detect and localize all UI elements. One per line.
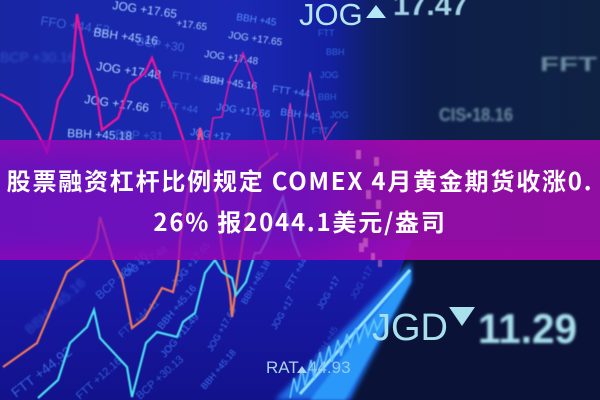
ticker text lower panel: JOG +17.66 bbox=[205, 306, 238, 353]
label: JGD ticker lower right: 11.29 bbox=[478, 305, 577, 352]
ticker text lower panel: FTT +44 bbox=[283, 256, 309, 291]
ticker text left panel: JOG +17 bbox=[190, 127, 231, 144]
ticker text lower panel: BBH +45 bbox=[313, 325, 340, 361]
ticker text lower panel: BBH +45.16 bbox=[21, 274, 89, 337]
ticker text fading right column: FTT bbox=[318, 28, 335, 38]
ticker text lower panel: FTT +44.11 bbox=[117, 298, 162, 340]
label: RAT ticker: 44.93 bbox=[308, 358, 351, 377]
ticker text left panel: BCP +31 bbox=[115, 127, 164, 144]
ticker text lower panel: BBH +45.18 bbox=[199, 347, 238, 391]
lower left deep blue panel bbox=[0, 240, 415, 400]
blurred ticker labels: FFT bbox=[540, 54, 597, 76]
line chart: pink overlay upper segment bbox=[180, 128, 222, 250]
ticker text lower panel: JOG +17.48 bbox=[118, 244, 170, 283]
title: 股票融资杠杆比例规定 COMEX 4月黄金期货收涨0. bbox=[7, 162, 593, 197]
ticker text left panel: BBH +45 bbox=[280, 107, 321, 124]
label: JGD ticker lower right bbox=[372, 305, 577, 352]
ticker text left panel: BBH +45.16 bbox=[93, 25, 159, 48]
ticker text left panel bbox=[0, 0, 321, 144]
title bbox=[7, 162, 593, 238]
ticker text lower panel: JOG +17 bbox=[315, 275, 342, 311]
title: 26% 报2044.1美元/盎司 bbox=[153, 203, 447, 238]
ticker text left panel: FTT +44 bbox=[272, 84, 311, 100]
blurred ticker labels bbox=[439, 54, 597, 125]
ticker text lower panel: BCP +30.16 bbox=[93, 248, 150, 302]
ticker text left panel: FFO +44.52 bbox=[40, 13, 111, 38]
ticker text fading right column: BBH bbox=[326, 47, 345, 57]
purple title band bbox=[0, 140, 600, 260]
ticker text lower panel: JOG +17.65 bbox=[170, 240, 213, 289]
blurred ticker labels: CIS▪18.16 bbox=[439, 105, 513, 125]
ticker text left panel: BCP +30.16 bbox=[0, 49, 76, 65]
label: RAT ticker bbox=[266, 358, 351, 377]
ticker text lower panel: BBH +45.18 bbox=[239, 259, 272, 306]
ticker text lower panel bbox=[8, 240, 375, 400]
ticker text left panel: FTT +44.49 bbox=[172, 70, 225, 88]
ticker text fading right column: JOG bbox=[320, 70, 339, 80]
label: JOG ticker top right bbox=[299, 0, 468, 32]
ticker text left panel: JOG +17.48 bbox=[204, 49, 259, 68]
line chart: upper pink line bbox=[0, 14, 190, 165]
ticker text fading right column: JOG bbox=[330, 110, 349, 120]
ticker text lower panel: BBH +45.16 bbox=[156, 283, 199, 332]
line chart: orange and pink lower line bbox=[3, 128, 278, 367]
ticker text lower panel: JOG +11.49 bbox=[159, 312, 202, 360]
ticker text fading right column bbox=[312, 28, 349, 136]
ticker text left panel: +17.65 bbox=[176, 18, 208, 33]
ticker text fading right column: FTT bbox=[312, 126, 329, 136]
ticker text left panel: FTT +44 bbox=[160, 100, 199, 116]
line chart: thin pink peak bbox=[285, 72, 337, 170]
ticker text left panel: BBH +45.18 bbox=[67, 126, 133, 143]
ticker text lower panel: JOG +17 bbox=[269, 295, 296, 331]
label: RAT ticker: RAT bbox=[266, 358, 299, 377]
ticker text left panel: JOG +17.65 bbox=[228, 30, 283, 49]
dark lower right area bbox=[350, 240, 600, 400]
ticker text lower panel: JOG +17 bbox=[348, 265, 375, 301]
ticker text left panel: BBH +45 bbox=[236, 12, 277, 29]
glowing cyan diagonal wave bbox=[275, 262, 411, 400]
ticker text left panel: BBH +45.16 bbox=[203, 74, 258, 93]
ticker text lower panel: FTT +44.92 bbox=[8, 343, 75, 400]
line chart: right pink line bbox=[208, 53, 270, 160]
ticker text left panel: JOG +17.66 bbox=[216, 102, 271, 121]
ticker text fading right column: BBH bbox=[318, 92, 337, 102]
ticker text left panel: BCP +30 bbox=[136, 34, 186, 55]
label: JGD ticker lower right: JGD bbox=[372, 307, 448, 349]
ticker text left panel: JOG +17.48 bbox=[96, 59, 162, 82]
ticker text left panel: JOG +17.66 bbox=[84, 92, 150, 115]
line chart: cyan line bbox=[38, 197, 300, 398]
